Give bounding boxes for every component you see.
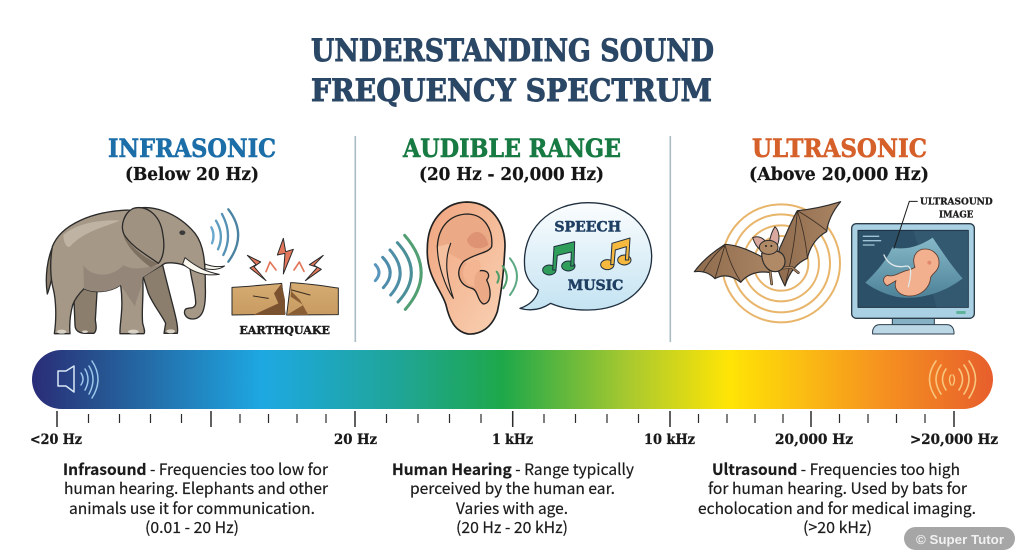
- icon: bat with echolocation rings: [694, 202, 841, 322]
- ultrasound fan: [865, 238, 963, 298]
- label: EARTHQUAKE: [239, 324, 330, 337]
- right wing: [776, 202, 841, 286]
- ear shadow: [123, 235, 158, 267]
- icon: ear with sound waves and speech bubble: [375, 202, 652, 334]
- panel divider right: [670, 136, 671, 342]
- panel divider left: [354, 136, 356, 342]
- text block: human hearing: [392, 458, 634, 538]
- legs: [770, 267, 798, 284]
- scale labels: 1 kHz: [492, 432, 533, 448]
- outgoing waves: [497, 258, 517, 295]
- screen readout: [863, 236, 881, 245]
- heading: ultrasonic: (Above 20,000 Hz): [749, 165, 929, 185]
- text block: infrasound: human hearing. Elephants and other: [64, 477, 329, 499]
- scale ticks: [57, 411, 954, 427]
- icon: earthquake: [232, 238, 338, 337]
- body, head and trunk: [51, 208, 205, 334]
- scale labels: >20,000 Hz: [910, 432, 998, 448]
- far legs: [73, 285, 97, 333]
- icon: ear with sound waves and speech bubble: MUSIC: [568, 278, 623, 294]
- icon: ultrasound monitor: [852, 196, 993, 334]
- heading: infrasonic: [108, 134, 276, 185]
- sound waves: [211, 209, 238, 262]
- body shading: [83, 265, 162, 307]
- icon: ear with sound waves and speech bubble: SPEECH: [554, 220, 621, 236]
- icon: green music note: [543, 242, 575, 275]
- stand: [892, 318, 934, 326]
- text block: ultrasound: Ultrasound - Frequencies too high: [712, 458, 960, 480]
- scale labels: 20 Hz: [334, 432, 377, 448]
- heading: audible range: (20 Hz - 20,000 Hz): [419, 165, 604, 185]
- heading: ultrasonic: ULTRASONIC: [752, 134, 927, 163]
- title: FREQUENCY SPECTRUM: [311, 73, 712, 109]
- indicator: [956, 311, 966, 314]
- incoming waves: [375, 235, 421, 309]
- tusks: [183, 258, 219, 275]
- heading: audible range: AUDIBLE RANGE: [402, 134, 621, 163]
- heading: audible range: [402, 134, 621, 185]
- heading: ultrasonic: [749, 134, 929, 185]
- toes: [57, 329, 175, 334]
- text block: human hearing: perceived by the human ear.: [410, 477, 615, 499]
- text block: ultrasound: for human hearing. Used by bats for: [708, 477, 968, 499]
- screen: [858, 230, 968, 307]
- icon: ultrasonic emitter: [930, 361, 976, 398]
- ear: [427, 202, 505, 334]
- spectrum bar: [32, 350, 993, 409]
- tail: [46, 245, 57, 294]
- scale labels: [30, 432, 998, 448]
- eye: [179, 230, 185, 235]
- text block: human hearing: Varies with age.: [456, 497, 568, 519]
- frame: [852, 224, 974, 318]
- callout line: [894, 201, 917, 248]
- icon: ultrasound monitor: IMAGE: [939, 210, 973, 221]
- text block: ultrasound: echolocation and for medical imaging.: [698, 497, 976, 519]
- text block: infrasound: (0.01 - 20 Hz): [145, 516, 239, 538]
- text block: infrasound: [63, 458, 329, 538]
- rings: [722, 204, 840, 322]
- text block: ultrasound: [698, 458, 976, 538]
- speech bubble: [520, 203, 652, 310]
- scale labels: 20,000 Hz: [775, 432, 853, 448]
- watermark badge: © Super Tutor: [916, 532, 1004, 547]
- title: UNDERSTANDING SOUND: [311, 33, 714, 69]
- icon: yellow music note: [601, 238, 631, 270]
- icon: speaker: [58, 361, 98, 398]
- text block: human hearing: (20 Hz - 20 kHz): [456, 516, 568, 538]
- icon: elephant with sound waves: [46, 208, 338, 337]
- title: [311, 33, 714, 109]
- text block: human hearing: Human Hearing - Range typically: [392, 458, 634, 480]
- ear: [122, 208, 164, 263]
- text block: infrasound: animals use it for communication.: [69, 497, 315, 519]
- scale labels: 10 kHz: [644, 432, 695, 448]
- callout label: ULTRASOUND: [920, 196, 993, 207]
- fetus: [884, 249, 939, 296]
- watermark badge: [904, 527, 1015, 550]
- scale labels: <20 Hz: [30, 432, 82, 448]
- heading: infrasonic: (Below 20 Hz): [125, 165, 259, 185]
- text block: infrasound: Infrasound - Frequencies too low for: [63, 458, 329, 480]
- ears and head: [753, 237, 767, 249]
- text block: ultrasound: (>20 kHz): [803, 516, 872, 538]
- heading: infrasonic: INFRASONIC: [108, 134, 276, 163]
- left wing: [694, 244, 771, 282]
- body: [762, 251, 785, 272]
